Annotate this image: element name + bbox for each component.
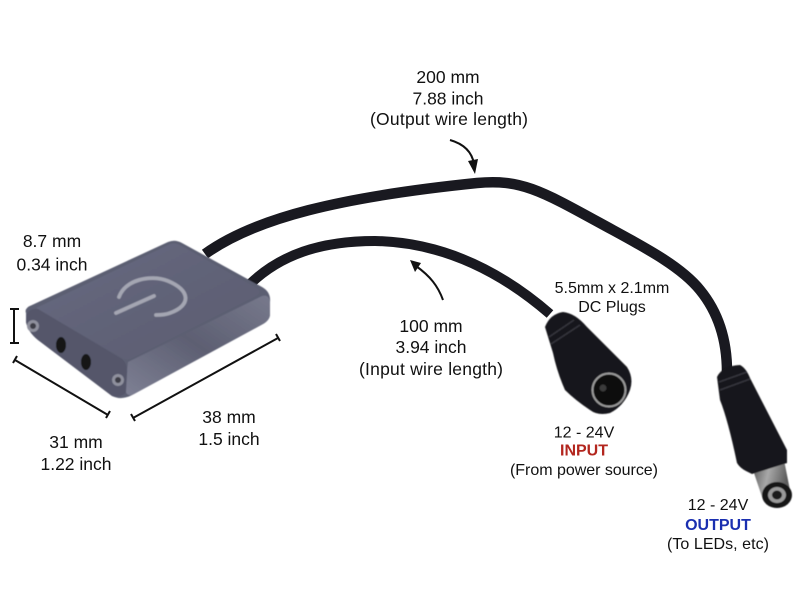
module top face [36,243,260,360]
label: input voltage: 12 - 24V [554,424,615,442]
label: output wire length: 7.88 inch [412,88,484,108]
label: width: 31 mm [49,432,103,452]
label: DC plugs [555,280,669,316]
label: output voltage: 12 - 24V [688,497,749,514]
screw right [112,374,124,386]
label: output wire length [370,67,528,129]
label: height: 8.7 mm [23,231,81,251]
icon: power symbol [116,278,186,315]
label: output voltage [667,497,769,553]
label: DC plugs: DC Plugs [578,299,646,316]
label: length [198,407,260,449]
module long side [125,296,270,395]
label: input voltage: (From power source) [510,462,658,479]
label: input wire length: 100 mm [399,316,463,336]
label: height [16,231,88,274]
dimension: length [131,334,280,421]
screw left [27,320,39,332]
jack left [56,337,66,353]
jack right [81,354,91,370]
label: output voltage: (To LEDs, etc) [667,536,769,553]
male DC plug [717,365,792,508]
label: input wire length [359,316,503,379]
label: length: 1.5 inch [198,429,260,449]
label: output wire length: (Output wire length) [370,109,528,129]
metal barrel [752,455,790,497]
label: input voltage [510,424,658,479]
module front face [26,309,127,396]
strain relief and barrel [545,312,631,414]
socket rim [592,374,626,406]
plug ridges [549,320,580,344]
label: output voltage: OUTPUT [685,517,751,534]
plug tip [762,482,792,508]
label: input wire length: 3.94 inch [395,337,467,357]
module body [26,241,270,398]
strain relief and body [717,365,787,474]
label: output wire length: 200 mm [416,67,480,87]
dimension: height [10,309,19,343]
label: height: 0.34 inch [16,254,88,274]
label: width: 1.22 inch [40,454,112,474]
dimension: width [13,356,110,418]
arrow: input wire [410,260,443,300]
plug ridges [719,372,750,390]
switch module [26,241,270,398]
wire: input cable [250,241,550,314]
label: input wire length: (Input wire length) [359,359,503,379]
label: input voltage: INPUT [560,442,608,460]
label: width [40,432,112,474]
socket pin [600,384,606,392]
wire: output cable [205,182,727,372]
female DC plug [545,312,631,414]
label: length: 38 mm [202,407,256,427]
arrow: output wire [450,140,478,174]
label: DC plugs: 5.5mm x 2.1mm [555,280,669,297]
